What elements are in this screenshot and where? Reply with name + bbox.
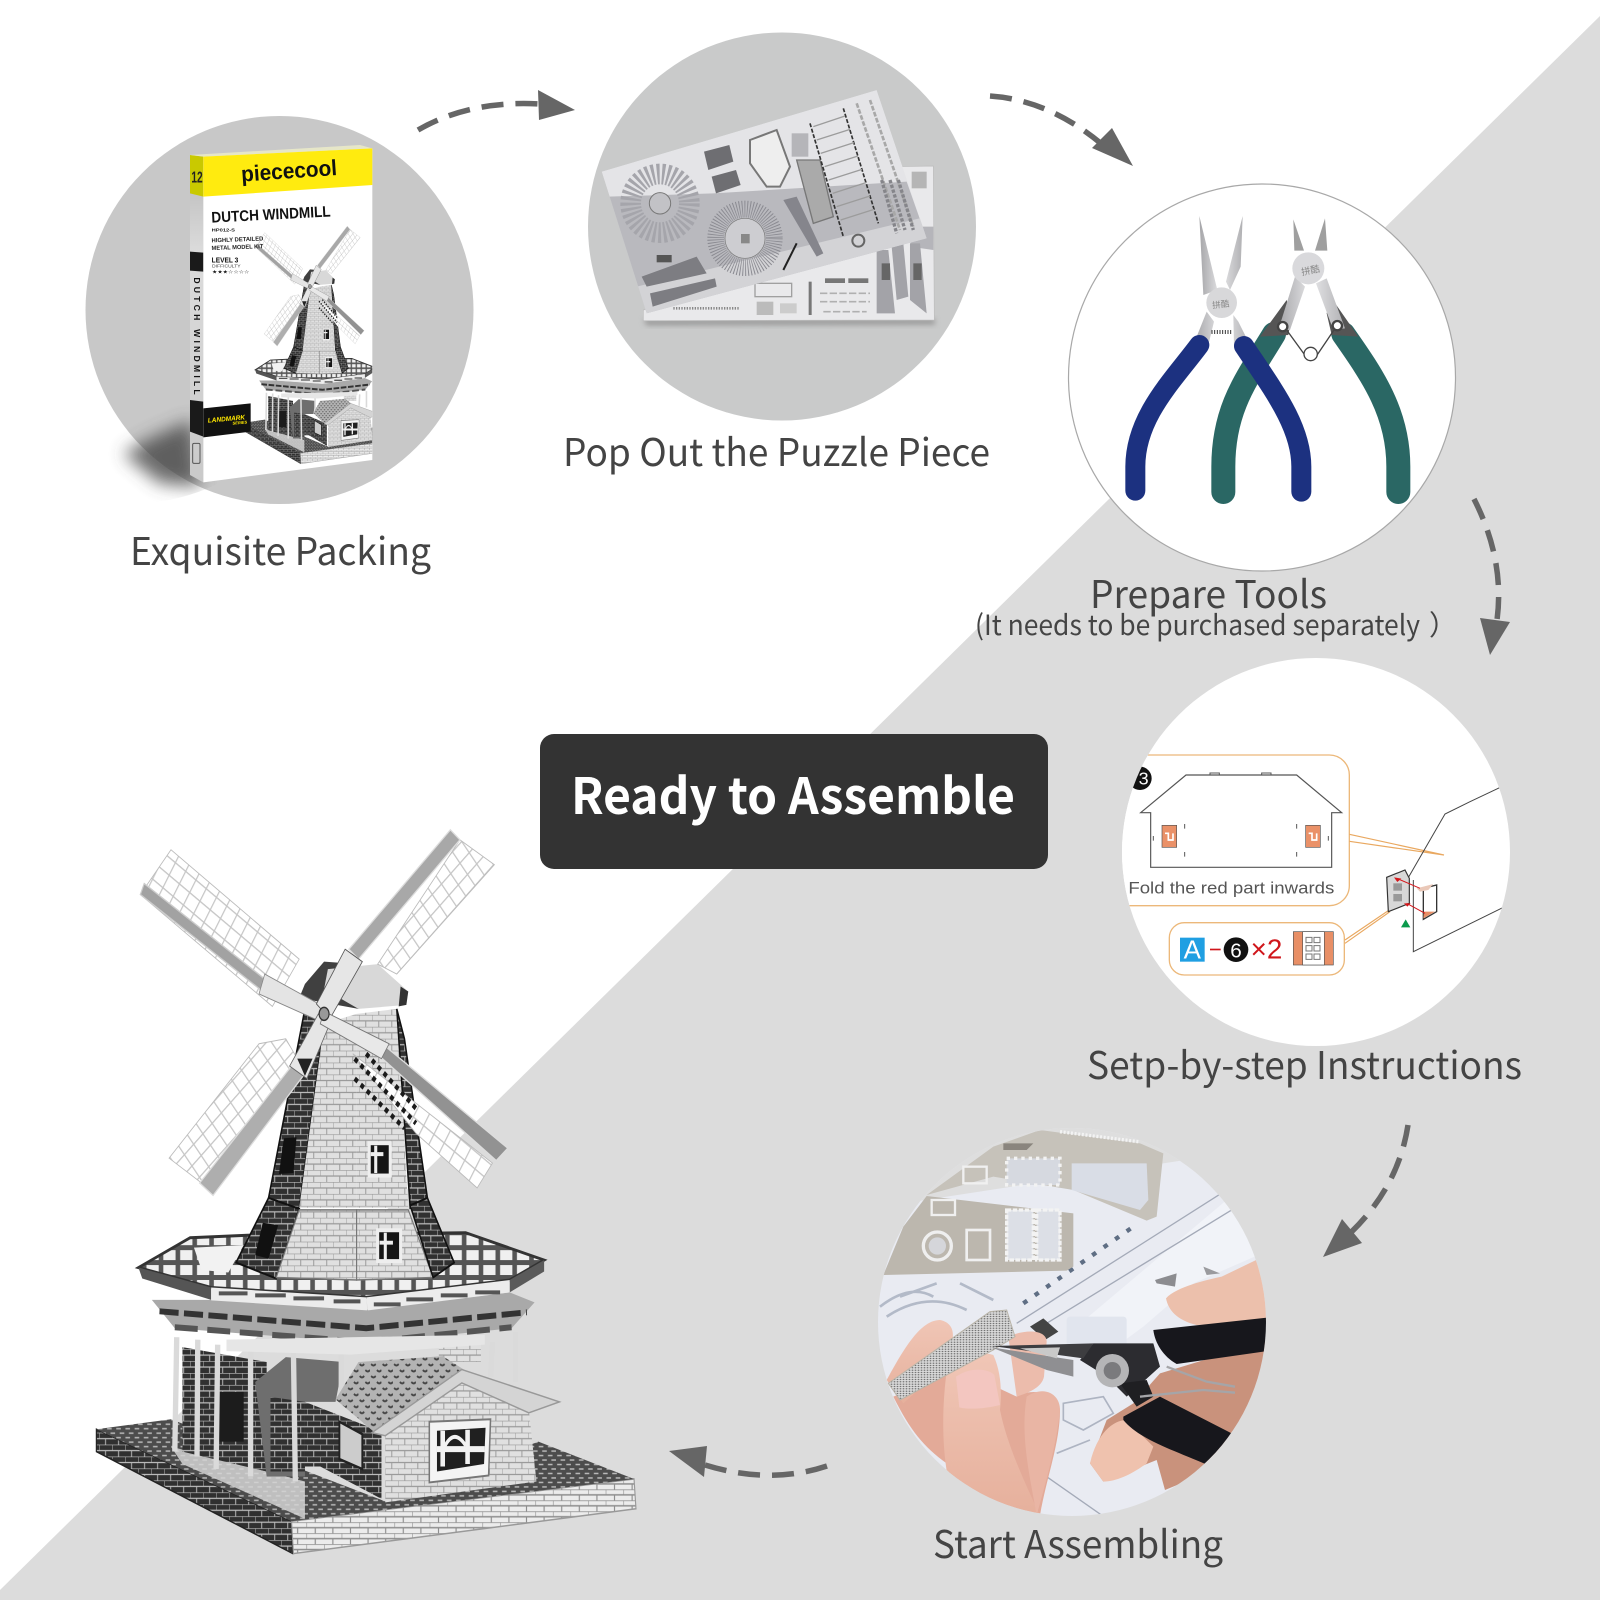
box text: LANDMARK xyxy=(208,414,247,425)
sail: upper left xyxy=(140,850,328,1021)
callout: ready to assemble: Ready to Assemble xyxy=(571,757,1015,829)
cutter pliers: 拼酷 xyxy=(1300,261,1321,278)
sheet shadow xyxy=(643,319,935,325)
metal sheets xyxy=(602,90,935,325)
instruction diagram xyxy=(1100,755,1503,975)
house wall xyxy=(385,1382,536,1502)
circle background xyxy=(588,32,976,420)
arrow: tools to instructions xyxy=(1474,499,1510,655)
front sheet xyxy=(602,90,927,313)
box text: SERIES xyxy=(232,419,248,426)
leader lines xyxy=(1345,834,1444,943)
back sheet xyxy=(643,166,934,321)
radial platform xyxy=(716,209,774,268)
long slats xyxy=(810,108,878,237)
house roof xyxy=(372,1370,559,1436)
box text: ★★★☆☆☆☆ xyxy=(212,269,250,275)
note: ） xyxy=(1429,604,1457,644)
gear wheel xyxy=(631,174,689,233)
arrow: puzzle to tools xyxy=(990,96,1133,166)
finished windmill model xyxy=(96,830,636,1554)
right hand xyxy=(1090,1253,1270,1490)
needle-nose pliers: 拼酷 xyxy=(1212,298,1230,311)
circle background xyxy=(1122,658,1510,1046)
box shadow xyxy=(123,420,200,487)
sail: lower left xyxy=(169,1014,330,1195)
circle background xyxy=(86,116,474,504)
step 3: prepare tools xyxy=(975,184,1457,644)
box text xyxy=(191,155,338,426)
circle background xyxy=(1068,184,1456,571)
arrow: assembling to finished model xyxy=(669,1446,827,1477)
caption: Setp-by-step Instructions xyxy=(1087,1035,1522,1090)
arrow: packing to puzzle xyxy=(418,90,575,130)
callout: part number: ×2 xyxy=(1251,933,1282,964)
mesh panels xyxy=(704,145,733,170)
box text: DIFFICULTY xyxy=(212,264,241,269)
box text: LEVEL 3 xyxy=(212,256,238,265)
pliers xyxy=(1135,216,1398,492)
needle-nose pliers xyxy=(1135,216,1301,492)
step 4: instructions xyxy=(1087,658,1522,1090)
box text: 12 xyxy=(191,170,203,187)
box text: piececool xyxy=(240,155,338,187)
sail: upper right xyxy=(316,830,494,1019)
instruction paper xyxy=(879,1128,1254,1514)
box front xyxy=(203,148,372,482)
posts xyxy=(175,1332,515,1481)
cutter pliers xyxy=(1223,218,1398,492)
upper metal sheet xyxy=(927,1130,1163,1221)
caption: Start Assembling xyxy=(933,1514,1223,1569)
left hand xyxy=(887,1320,1060,1515)
callout: part number: A xyxy=(1184,935,1202,965)
box text: METAL MODEL KIT xyxy=(212,244,264,252)
box text: DUTCH WINDMILL xyxy=(192,277,202,395)
caption: Exquisite Packing xyxy=(130,521,431,576)
house window xyxy=(429,1419,491,1482)
base platform xyxy=(96,1419,636,1554)
box text: HIGHLY DETAILED xyxy=(212,237,264,244)
callout: part number: 6 xyxy=(1230,939,1242,962)
hands photo xyxy=(878,1130,1266,1516)
plier tool xyxy=(992,1317,1270,1467)
callout: fold: 3 xyxy=(1139,769,1149,789)
note: (It needs to be purchased separately xyxy=(975,604,1420,644)
box text: HP012-S xyxy=(212,227,236,233)
box text: DUTCH WINDMILL xyxy=(211,203,331,227)
step 1: exquisite packing xyxy=(86,116,474,576)
box mini windmill xyxy=(243,226,402,464)
metal part xyxy=(888,1310,1015,1400)
caption: Prepare Tools xyxy=(1090,564,1327,619)
caption: Pop Out the Puzzle Piece xyxy=(563,422,990,477)
callout: fold xyxy=(1100,755,1349,906)
wall assembly xyxy=(1387,787,1503,952)
back room xyxy=(182,1337,481,1499)
tower xyxy=(236,962,454,1280)
product box xyxy=(123,145,402,487)
sail: lower right xyxy=(320,1011,508,1188)
step 5: start assembling xyxy=(878,1130,1266,1568)
hub xyxy=(319,1007,329,1020)
callout: fold: Fold the red part inwards xyxy=(1128,878,1334,897)
gallery deck xyxy=(138,1233,544,1355)
callout: ready to assemble xyxy=(540,734,1048,869)
step 2: pop out the puzzle piece xyxy=(563,32,990,477)
arrow: instructions to assembling xyxy=(1323,1125,1408,1257)
box spine xyxy=(190,155,203,482)
callout: part number xyxy=(1169,923,1344,975)
annex roof xyxy=(336,1356,464,1432)
lower metal sheet xyxy=(883,1196,1073,1275)
